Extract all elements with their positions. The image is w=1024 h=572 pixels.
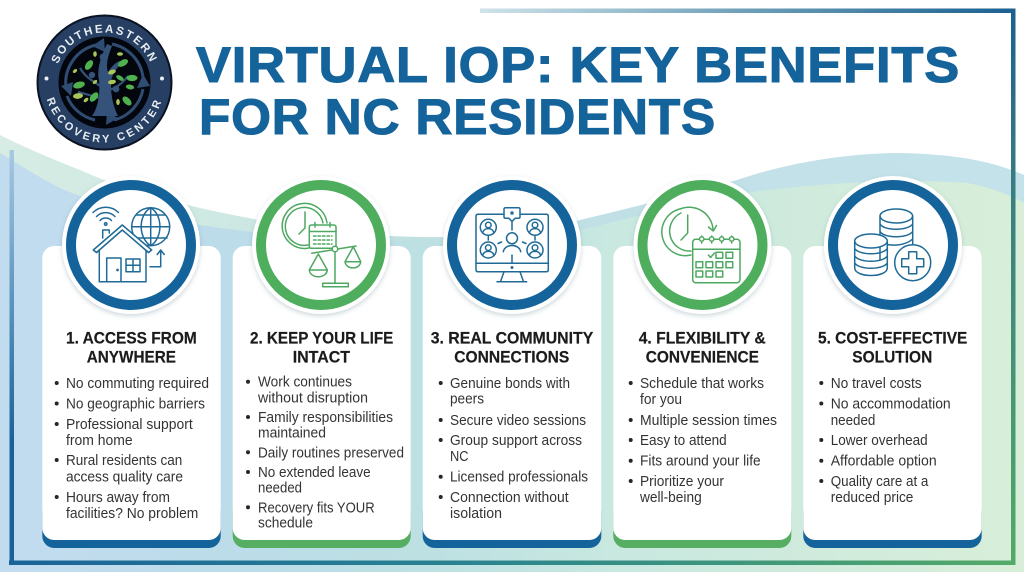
bullet list: Hours away from: [66, 489, 170, 506]
bullet list: Genuine bonds with: [450, 375, 570, 392]
bullet list: Professional support: [66, 416, 193, 433]
bullet list: for you: [640, 391, 682, 408]
bullet list: well-being: [639, 489, 702, 506]
icon: monitor with connected people: [476, 208, 548, 282]
heading: 2. KEEP YOUR LIFE: [250, 328, 393, 348]
bullet list: NC: [450, 448, 469, 465]
heading: [639, 328, 766, 367]
bullet list: isolation: [450, 505, 502, 522]
bullet list: Quality care at a: [831, 473, 929, 490]
bullet list: Fits around your life: [640, 453, 761, 470]
logo: Southeastern Recovery Center: SOUTHEASTERN: [52, 24, 157, 63]
bullet list: [246, 374, 404, 532]
bullet list: maintained: [258, 425, 326, 442]
bullet list: from home: [66, 432, 133, 449]
bullet list: Connection without: [450, 489, 569, 506]
bullet list: reduced price: [831, 489, 913, 506]
heading: [431, 328, 594, 367]
bullet list: No accommodation: [831, 396, 951, 412]
panel: 3. real community connections: [423, 176, 601, 548]
bullet list: [819, 375, 951, 506]
title: FOR NC RESIDENTS: [199, 89, 716, 145]
bullet list: Daily routines preserved: [258, 444, 404, 461]
bullet list: [55, 375, 209, 522]
heading: 5. COST-EFFECTIVE: [818, 328, 967, 348]
title: [196, 37, 960, 145]
bullet list: No extended leave: [258, 464, 371, 481]
bullet list: Family responsibilities: [258, 409, 393, 426]
heading: 3. REAL COMMUNITY: [431, 328, 594, 348]
bullet list: Easy to attend: [640, 432, 727, 449]
bullet list: [629, 375, 777, 506]
bullet list: facilities? No problem: [66, 505, 198, 522]
bullet list: Prioritize your: [640, 473, 724, 490]
icon: clock and calendar: [662, 207, 740, 283]
bullet list: No geographic barriers: [66, 396, 205, 412]
panel: 2. keep your life intact: [233, 176, 411, 548]
bullet list: Licensed professionals: [450, 469, 588, 486]
icon: clock, calendar and scales: [282, 203, 361, 287]
bullet list: Work continues: [258, 374, 352, 391]
bullet list: Rural residents can: [66, 452, 182, 469]
heading: [818, 328, 967, 367]
panel: 4. flexibility and convenience: [613, 176, 791, 548]
panel: 5. cost-effective solution: [803, 176, 982, 548]
bullet list: access quality care: [66, 469, 183, 486]
bullet list: needed: [258, 480, 302, 497]
bullet list: Affordable option: [831, 453, 937, 470]
bullet list: Schedule that works: [640, 375, 764, 392]
heading: SOLUTION: [852, 348, 932, 367]
bullet list: Recovery fits YOUR: [258, 499, 375, 516]
heading: INTACT: [293, 348, 351, 367]
bullet list: Lower overhead: [831, 432, 928, 449]
bullet list: Secure video sessions: [450, 412, 586, 429]
bullet list: needed: [831, 412, 875, 429]
bullet list: No commuting required: [66, 375, 209, 392]
heading: 4. FLEXIBILITY &: [639, 328, 766, 348]
heading: ANYWHERE: [87, 348, 176, 367]
bullet list: schedule: [258, 515, 313, 532]
bullet list: No travel costs: [831, 375, 922, 392]
heading: [250, 328, 393, 367]
title: VIRTUAL IOP: KEY BENEFITS: [196, 37, 960, 93]
heading: 1. ACCESS FROM: [66, 328, 197, 348]
heading: CONVENIENCE: [646, 348, 759, 367]
logo: Southeastern Recovery Center: RECOVERY CENTER: [46, 97, 162, 142]
panel: 1. access from anywhere: [42, 176, 221, 548]
heading: [66, 328, 197, 367]
heading: CONNECTIONS: [454, 348, 569, 367]
bullet list: [439, 375, 588, 522]
icon: house with wifi and globe: [93, 207, 170, 282]
bullet list: Multiple session times: [640, 412, 777, 429]
logo: Southeastern Recovery Center: [36, 14, 172, 150]
icon: coin stacks with plus: [855, 209, 931, 281]
bullet list: peers: [450, 390, 484, 408]
bullet list: without disruption: [257, 390, 368, 407]
bullet list: Group support across: [450, 432, 582, 449]
